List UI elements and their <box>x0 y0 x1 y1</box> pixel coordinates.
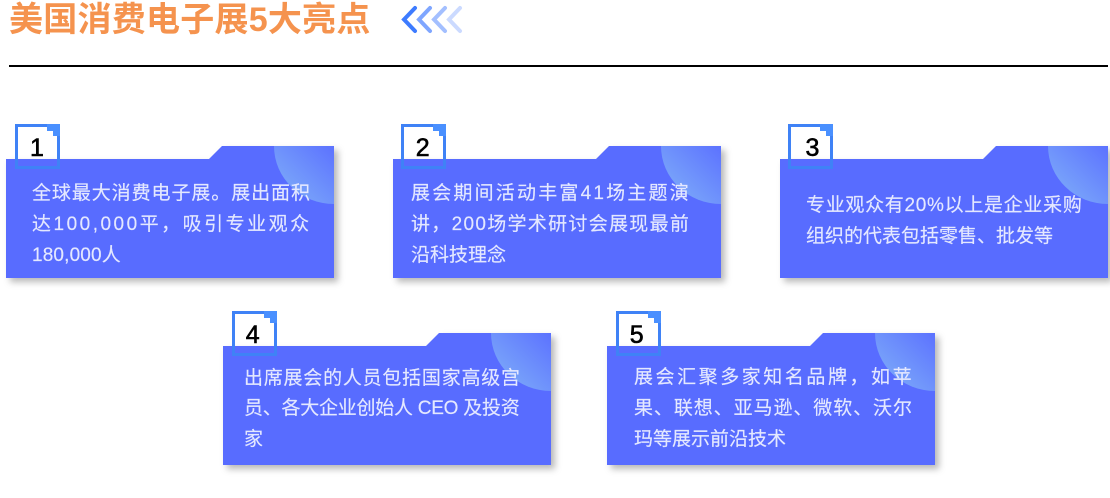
number badge 3: 3 <box>806 134 819 162</box>
text block <box>411 182 691 266</box>
panel: highlight 3 <box>780 124 1110 286</box>
text block: 组织的代表包括零售、批发等 <box>806 226 1053 247</box>
card shape <box>607 333 943 473</box>
card shape <box>393 146 729 286</box>
text block <box>806 194 1083 247</box>
text block: 展会汇聚多家知名品牌，如苹 <box>634 367 914 388</box>
number badge 5: 5 <box>630 321 644 349</box>
panel: highlight 1 <box>6 124 342 286</box>
text block: 展会期间活动丰富41场主题演 <box>411 183 691 204</box>
number badge 1 <box>15 124 60 169</box>
panel: highlight 2 <box>393 124 729 286</box>
text block: 出席展会的人员包括国家高级宫 <box>244 368 521 389</box>
number badge 4: 4 <box>246 321 260 349</box>
card shape <box>6 146 342 286</box>
text block: 专业观众有20%以上是企业采购 <box>806 195 1083 216</box>
number badge 2 <box>401 124 446 169</box>
panel: highlight 4 <box>223 311 559 473</box>
text block: 果、联想、亚马逊、微软、沃尔 <box>634 398 913 419</box>
text block <box>634 366 914 450</box>
title: 美国消费电子展5大亮点 <box>9 1 371 39</box>
number badge 5 <box>616 311 661 356</box>
text block: 玛等展示前沿技术 <box>634 429 786 450</box>
text block: 达100,000平，吸引专业观众 <box>32 214 312 235</box>
text block: 全球最大消费电子展。展出面积 <box>32 183 311 204</box>
number badge 3 <box>788 124 833 169</box>
panel: highlight 5 <box>607 311 943 473</box>
text block: 沿科技理念 <box>411 245 506 266</box>
card shape <box>223 333 559 473</box>
number badge 2: 2 <box>416 134 430 162</box>
text block: 员、各大企业创始人 CEO 及投资 <box>244 398 519 419</box>
card shape <box>780 146 1110 286</box>
text block <box>244 368 521 450</box>
number badge 1: 1 <box>30 134 44 162</box>
number badge 4 <box>232 311 277 356</box>
text block: 家 <box>244 429 263 450</box>
text block: 讲，200场学术研讨会展现最前 <box>411 214 690 235</box>
icon: chevrons <box>401 6 462 34</box>
text block <box>32 182 312 266</box>
text block: 180,000人 <box>32 245 121 266</box>
